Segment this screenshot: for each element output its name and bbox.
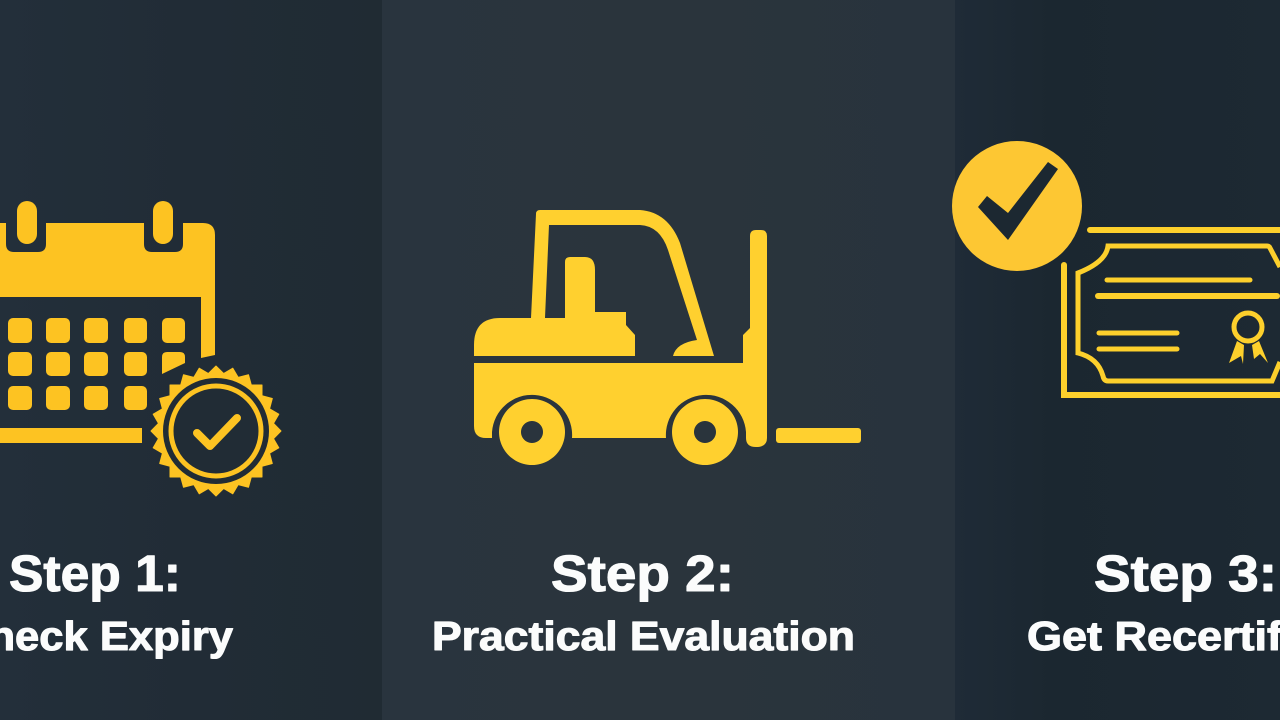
panel: step 2 background [382, 0, 955, 720]
panel: step 3 background [955, 0, 1280, 720]
panel: step 1 background [0, 0, 382, 720]
certificate outer frame [1064, 230, 1280, 395]
icon: certificate with check [952, 141, 1280, 395]
check circle [952, 141, 1082, 271]
heading: step 3: Step 3: [1094, 545, 1277, 602]
label: practical evaluation: Practical Evaluation [432, 613, 855, 659]
forklift wheels [499, 399, 738, 465]
calendar header and frame [0, 223, 215, 358]
check mark [978, 162, 1058, 240]
seal badge [151, 366, 281, 496]
calendar bottom edge [0, 428, 142, 443]
icon: calendar with seal [0, 201, 281, 496]
forklift cab and counterweight [474, 210, 714, 356]
icon: forklift [474, 210, 861, 465]
certificate ribbon seal [1229, 313, 1268, 364]
certificate text lines [1098, 280, 1277, 349]
certificate inner frame [1078, 246, 1280, 381]
heading: step 2: Step 2: [551, 545, 734, 602]
calendar binder pegs [17, 201, 173, 244]
heading: step 1: Step 1: [9, 545, 181, 602]
forklift body and mast [474, 230, 767, 447]
calendar date grid [8, 318, 185, 410]
forklift fork [776, 428, 861, 443]
